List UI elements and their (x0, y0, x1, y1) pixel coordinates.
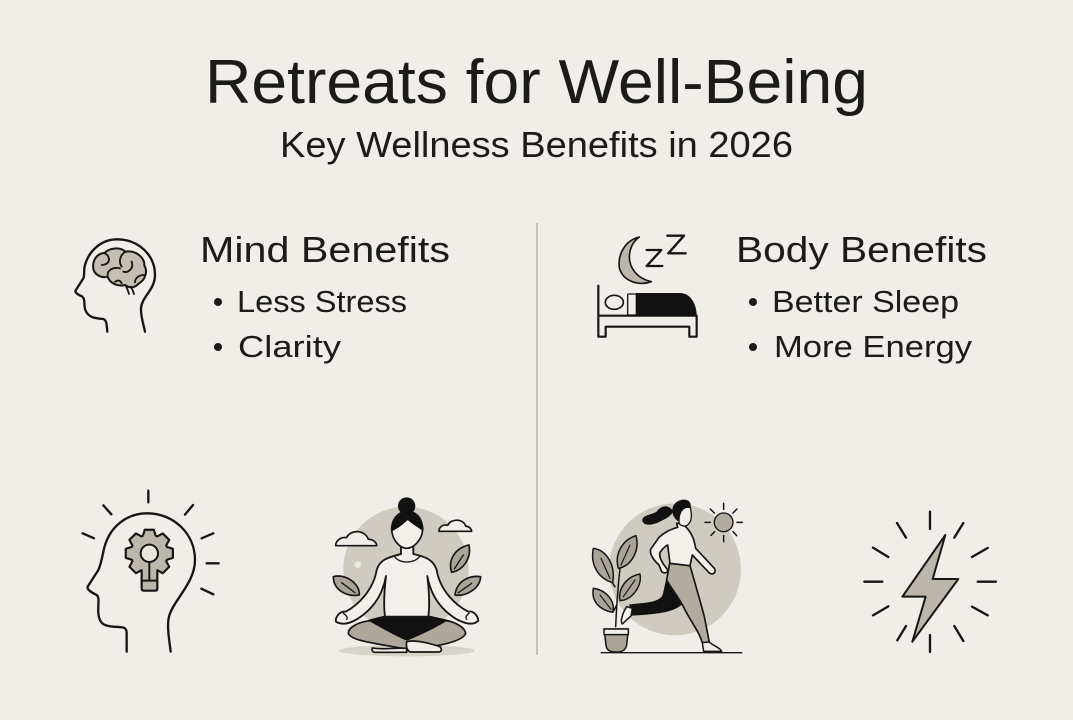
torso and arms (336, 543, 478, 624)
bed (598, 286, 697, 337)
backdrop circle (609, 503, 741, 635)
list item: clarity: Clarity (238, 329, 342, 364)
icon: lightning bolt with rays (864, 512, 996, 652)
front leg (667, 563, 709, 643)
legs (348, 620, 466, 649)
heading: body benefits: Body Benefits (736, 229, 987, 270)
panel: body benefits text (736, 229, 987, 364)
backdrop circle (343, 507, 469, 632)
back leg (630, 580, 685, 615)
title: Retreats for Well-Being (205, 48, 868, 117)
icon: running woman with plant and sun (593, 500, 742, 653)
list item: more energy: More Energy (774, 329, 973, 364)
list item: less stress: Less Stress (237, 284, 407, 319)
list item: better sleep: Better Sleep (772, 284, 959, 319)
hair and bun (391, 497, 423, 532)
icon: head with brain (75, 239, 155, 332)
shorts (369, 616, 447, 640)
feet (372, 641, 441, 652)
hair and ponytail (642, 500, 691, 525)
clouds (336, 520, 472, 546)
icon: moon and bed (598, 236, 697, 337)
plant (593, 536, 640, 652)
sleep letters (647, 236, 686, 266)
list item: clarity (214, 329, 342, 364)
panel: mind benefits text (200, 229, 450, 364)
back shoe (621, 607, 632, 624)
sun (705, 503, 742, 542)
subtitle: Key Wellness Benefits in 2026 (280, 124, 793, 165)
front shoe (702, 642, 722, 651)
leaves (333, 545, 481, 595)
head (392, 520, 423, 548)
icon: head with gear and lightbulb (83, 491, 219, 652)
ground line (601, 651, 742, 655)
moon (619, 237, 651, 283)
heading: mind benefits: Mind Benefits (200, 229, 450, 270)
icon: meditating woman (333, 497, 481, 656)
torso and arms (650, 523, 715, 574)
head (679, 507, 691, 526)
